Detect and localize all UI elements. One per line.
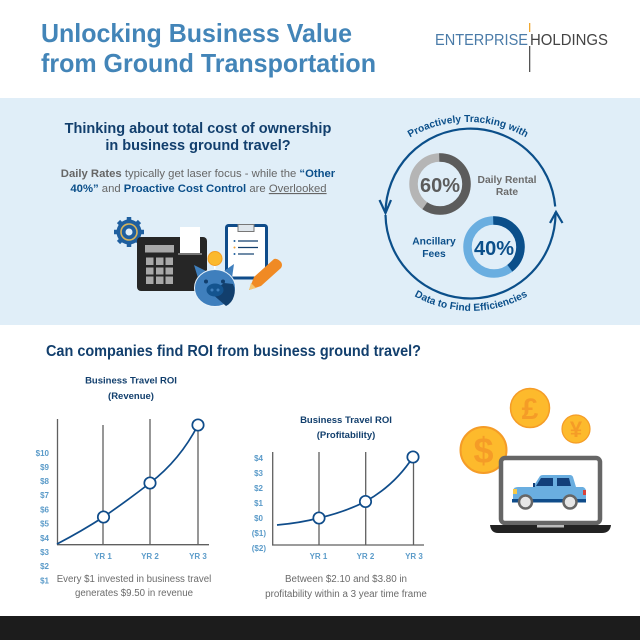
icon: yen coin (562, 415, 590, 443)
axis lines: profitability (272, 452, 424, 546)
y axis labels: profitability: ($1) (252, 529, 266, 538)
caption: profitability: Between $2.10 and $3.80 in (285, 574, 407, 585)
icon: pencil (249, 259, 282, 290)
x axis labels: revenue: YR 1 (94, 552, 112, 561)
x axis labels: profitability: YR 2 (357, 552, 375, 561)
y axis labels: profitability: $3 (254, 469, 264, 478)
y axis labels: revenue: $9 (40, 463, 50, 472)
chart title: profitability: Business Travel ROI (300, 415, 392, 426)
label: daily rental rate: Daily Rental (478, 175, 537, 186)
icon: clipboard (226, 224, 266, 278)
x axis labels: revenue (94, 552, 207, 561)
x axis labels: profitability: YR 3 (405, 552, 423, 561)
heading: total cost (65, 121, 331, 154)
icon: calculator (137, 227, 207, 291)
y axis labels: profitability: $1 (254, 499, 264, 508)
curve: profitability (277, 457, 413, 525)
y axis labels: revenue (36, 449, 50, 586)
heading: total cost: Thinking about total cost of ownership (65, 121, 331, 137)
label: ancillary fees: Fees (422, 249, 446, 260)
curved label: bottom: Data to Find Efficiencies (414, 290, 527, 311)
icon: laptop (490, 458, 611, 533)
text block: daily rates: 40%” and Proactive Cost Control are Overlooked (70, 183, 327, 195)
y axis labels: profitability: $0 (254, 514, 264, 523)
caption: revenue: Every $1 invested in business travel (57, 574, 211, 585)
label: ancillary fees (412, 236, 456, 260)
arrow: top arc (380, 129, 555, 213)
caption: profitability (265, 574, 427, 600)
curved label: top: Proactively Tracking with (407, 115, 528, 138)
chart title: revenue: Business Travel ROI (85, 376, 177, 386)
label: daily rental rate (478, 175, 537, 198)
chart title: revenue: (Revenue) (108, 391, 154, 402)
text block: daily rates (61, 168, 336, 195)
y axis labels: profitability: $4 (254, 454, 264, 463)
y axis labels: revenue: $8 (40, 477, 50, 486)
label: ancillary fees: Ancillary (412, 236, 456, 248)
icon: car (512, 475, 586, 508)
y axis labels: revenue: $1 (40, 576, 50, 586)
title: Unlocking Business Value (41, 18, 352, 48)
title: from Ground Transportation (41, 48, 376, 78)
title (41, 18, 376, 78)
caption: revenue (57, 574, 211, 599)
data points: profitability (313, 451, 419, 524)
icon: yen coin: ¥ (570, 417, 583, 442)
text block: daily rates: Daily Rates typically get laser focus - while the “Other (61, 168, 336, 180)
donut: 40 percent: 40% (474, 238, 514, 260)
y axis labels: revenue: $7 (40, 491, 50, 500)
donut: 60 percent: 60% (420, 175, 460, 197)
heading: total cost: in business ground travel? (105, 138, 291, 154)
caption: profitability: profitability within a 3 year time frame (265, 589, 427, 600)
chart title: profitability (300, 415, 392, 441)
chart title: profitability: (Profitability) (317, 430, 375, 441)
chart: revenue ROI (36, 376, 211, 599)
icon: pound coin: £ (522, 393, 539, 426)
label: daily rental rate: Rate (496, 187, 518, 198)
x axis labels: profitability (310, 552, 423, 561)
logo: Enterprise Holdings: HOLDINGS (530, 32, 608, 49)
y axis labels: revenue: $6 (40, 506, 50, 514)
heading: ROI question: Can companies find ROI from business ground travel? (46, 343, 421, 360)
y axis labels: revenue: $3 (40, 548, 50, 557)
caption: revenue: generates $9.50 in revenue (75, 588, 193, 599)
footer bar (0, 616, 640, 640)
icon: dollar coin (460, 427, 506, 473)
x axis labels: profitability: YR 1 (310, 552, 328, 561)
donut: 60 percent (414, 158, 466, 210)
chart: profitability ROI (252, 415, 427, 600)
chart title: revenue (85, 376, 177, 402)
arrow: bottom arc (386, 212, 562, 298)
chart: 60/40 cost cycle (378, 115, 564, 311)
x axis labels: revenue: YR 2 (141, 552, 159, 561)
icon: dollar coin: $ (473, 430, 494, 471)
x axis labels: revenue: YR 3 (189, 552, 207, 561)
donut: 40 percent (468, 220, 520, 274)
logo: Enterprise Holdings (435, 23, 608, 72)
icon: gear (114, 217, 144, 247)
y axis labels: revenue: $2 (40, 562, 50, 571)
y axis labels: profitability (252, 454, 266, 553)
y axis labels: profitability: ($2) (252, 544, 266, 553)
y axis labels: revenue: $5 (40, 520, 50, 528)
curve: revenue (57, 425, 198, 544)
data points: revenue (98, 419, 204, 523)
y axis labels: revenue: $4 (40, 534, 50, 543)
icon: piggy bank with coin (194, 252, 236, 306)
logo: Enterprise Holdings: ENTERPRISE (435, 32, 528, 49)
axis lines: revenue (57, 419, 209, 545)
icon: pound coin (510, 388, 550, 428)
y axis labels: revenue: $10 (36, 449, 50, 458)
y axis labels: profitability: $2 (254, 484, 264, 493)
